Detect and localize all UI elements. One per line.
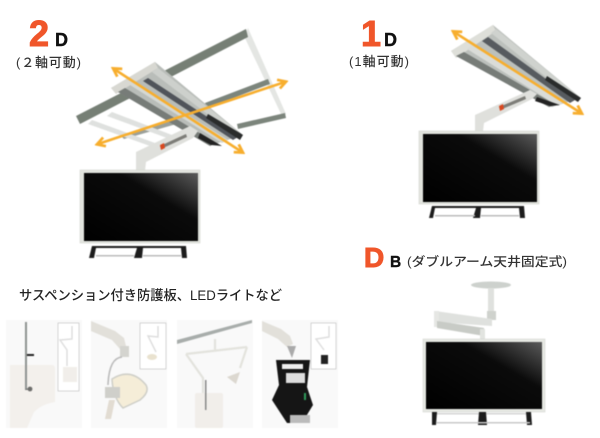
inset — [58, 323, 79, 391]
heading: 2D — [16, 13, 81, 70]
monitor — [423, 339, 545, 425]
photo: suspension protective plate — [6, 320, 82, 428]
monitor — [80, 170, 200, 258]
monitor — [419, 131, 539, 218]
heading: 1D: D — [384, 30, 397, 50]
product: 1D ceiling rail system — [419, 25, 581, 218]
photo: LED light — [91, 320, 167, 428]
moving carriage — [111, 62, 243, 146]
photo: black control box — [262, 320, 338, 428]
photo: rail-mounted plate and light — [177, 320, 253, 428]
inset — [140, 323, 166, 369]
double-headed arrow — [454, 32, 581, 113]
heading: DB: (ダブルアーム天井固定式) — [407, 254, 567, 269]
heading: accessories: サスペンション付き防護板、LEDライトなど — [19, 288, 283, 303]
heading: DB: D — [364, 242, 384, 273]
heading: 2D: D — [55, 30, 68, 50]
double-headed arrows — [98, 69, 285, 152]
heading: DB: B — [390, 254, 401, 271]
heading: 2D: 2 — [29, 13, 49, 54]
heading: 1D: (1軸可動) — [349, 54, 409, 69]
product: 2D ceiling rail system — [76, 28, 286, 258]
heading: 1D — [349, 13, 409, 69]
arm — [475, 90, 537, 131]
inset — [311, 323, 336, 369]
heading: DB — [364, 242, 567, 273]
ceiling mount and double arm — [434, 282, 511, 339]
product: DB double arm fixed type — [423, 282, 545, 425]
carriage — [451, 25, 581, 107]
rear frame rails — [76, 28, 286, 146]
heading: 1D: 1 — [361, 13, 381, 54]
arm — [136, 126, 198, 171]
heading: 2D: (２軸可動) — [16, 55, 81, 70]
